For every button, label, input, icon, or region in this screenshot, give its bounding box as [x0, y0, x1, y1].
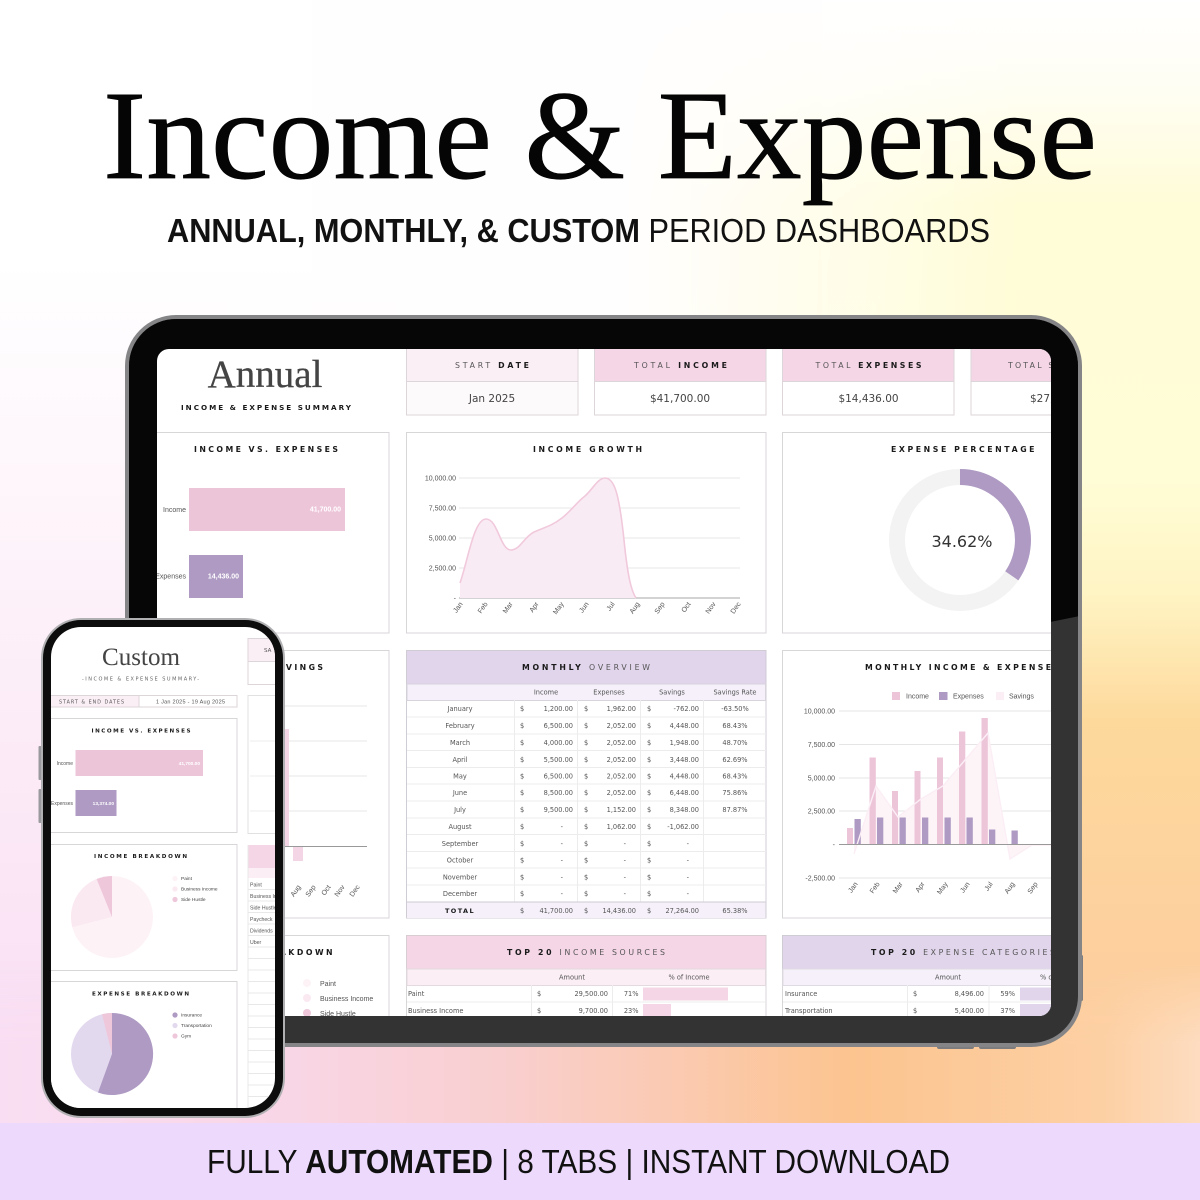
panel: income growth chart: -: [454, 596, 457, 602]
panel: savings chart: SAVINGS: [270, 663, 325, 672]
panel: custom income vs expenses: Expenses: [51, 801, 73, 807]
table rows: June: [452, 789, 467, 797]
table rows: $: [520, 840, 524, 848]
side column: table: Paint: [250, 882, 262, 888]
panel: top 20 expense categories: 5,400.00: [955, 1007, 984, 1015]
chart legend: Income: [906, 694, 929, 700]
phone side buttons: [38, 746, 42, 823]
month labels: Jan: [847, 881, 860, 894]
panel: income vs expenses: 14,436.00: [208, 574, 239, 580]
table rows: $: [584, 890, 588, 898]
table rows: 4,448.00: [670, 772, 699, 780]
panel: top 20 income sources: 9,700.00: [579, 1007, 608, 1015]
table rows: 1,062.00: [607, 823, 636, 831]
bar: income: [189, 488, 345, 531]
panel: top 20 income sources: $: [537, 1007, 541, 1015]
panel: monthly overview table: Expenses: [593, 688, 625, 696]
panel: income breakdown legend: BREAKDOWN: [255, 948, 335, 957]
panel: top 20 income sources: Amount: [559, 974, 585, 982]
bar: expenses: [189, 555, 243, 598]
phone bezel: [41, 618, 285, 1118]
table rows: $: [647, 840, 651, 848]
date range row: [40, 696, 237, 707]
month labels: Nov: [705, 601, 718, 615]
table rows: 6,500.00: [544, 722, 573, 730]
table rows: -: [687, 856, 690, 864]
panel: monthly income and expenses chart: 10,000.00: [804, 708, 835, 716]
panel: top 20 expense categories: Transportation: [784, 1007, 833, 1015]
table total row: TOTAL: [445, 907, 475, 915]
table rows: $: [584, 874, 588, 882]
table total row: $: [647, 907, 651, 915]
date range row: 1 Jan 2025 - 19 Aug 2025: [156, 700, 225, 706]
panel: income growth chart: 7,500.00: [429, 506, 456, 512]
table rows: 9,500.00: [544, 806, 573, 814]
heading: Custom: -INCOME & EXPENSE SUMMARY-: [82, 676, 199, 682]
table rows: $: [584, 806, 588, 814]
table rows: -63.50%: [721, 705, 749, 713]
month labels: Jan: [452, 601, 465, 614]
table rows: May: [453, 772, 467, 780]
table rows: -: [687, 890, 690, 898]
panel: top 20 expense categories: 8,496.00: [955, 990, 984, 998]
panel: custom income breakdown pie: Business Income: [181, 886, 218, 892]
panel: savings chart: Aug: [290, 884, 303, 898]
table rows: $: [584, 856, 588, 864]
panel: custom expense breakdown pie: Gym: [181, 1034, 191, 1040]
table rows: -762.00: [674, 705, 699, 713]
table rows: -: [624, 890, 627, 898]
panel: monthly overview table: Income: [534, 688, 558, 696]
table rows: 6,500.00: [544, 772, 573, 780]
panel: top 20 income sources: Paint: [408, 990, 425, 998]
card: start date: Jan 2025: [468, 393, 515, 405]
panel: monthly income and expenses chart: [782, 650, 1082, 918]
heading: Annual: INCOME & EXPENSE SUMMARY: [181, 403, 352, 412]
panel: income growth chart: INCOME GROWTH: [533, 445, 642, 454]
table rows: $: [584, 739, 588, 747]
table rows: 4,000.00: [544, 739, 573, 747]
card: total expenses: $14,436.00: [838, 393, 899, 405]
panel: custom income breakdown pie: INCOME BREAKDOWN: [94, 854, 187, 860]
tablet device: [100, 300, 1142, 1049]
panel: income vs expenses: Expenses: [155, 574, 186, 580]
heading: Custom: [82, 648, 199, 680]
side column: table: [248, 845, 275, 1108]
card: total savings: [970, 349, 1051, 416]
month labels: Jun: [959, 881, 972, 894]
table rows: December: [443, 890, 477, 898]
panel: income vs expenses: 41,700.00: [310, 506, 341, 514]
table rows: -: [624, 856, 627, 864]
chart legend: Savings: [1009, 694, 1034, 700]
month labels: Feb: [477, 601, 490, 615]
month labels: [453, 602, 740, 614]
table rows: $: [520, 739, 524, 747]
table rows: -: [561, 840, 564, 848]
month labels: Apr: [529, 601, 541, 614]
panel: savings chart: [284, 650, 390, 918]
card: total income: TOTAL INCOME: [633, 361, 727, 370]
side column: table: Paycheck: [250, 917, 273, 923]
table rows: -: [687, 840, 690, 848]
panel: custom income breakdown pie: Side Hustle: [181, 897, 206, 903]
month labels: Feb: [869, 881, 882, 895]
table total row: 27,264.00: [665, 907, 699, 915]
panel: custom income vs expenses: 13,374.00: [93, 801, 114, 807]
panel: top 20 expense categories: Insurance: [785, 990, 817, 998]
month labels: Oct: [681, 601, 693, 614]
panel: income breakdown legend: Business Income: [320, 996, 373, 1003]
table rows: 2,052.00: [607, 722, 636, 730]
table rows: 62.69%: [722, 756, 748, 764]
area line: [460, 478, 636, 598]
phone device: [38, 618, 298, 1122]
panel: monthly overview table: Savings: [659, 688, 685, 696]
month labels: Sep: [1027, 881, 1040, 895]
panel: monthly income and expenses chart: -2,500.00: [805, 876, 835, 882]
chart legend: Expenses: [953, 694, 984, 700]
table rows: $: [520, 705, 524, 713]
table rows: $: [584, 840, 588, 848]
panel: top 20 income sources: TOP 20 INCOME SOURCES: [507, 948, 665, 957]
panel: top 20 income sources: 23%: [624, 1007, 638, 1015]
table total row: $: [520, 907, 524, 915]
table rows: $: [520, 890, 524, 898]
table total row: $: [584, 907, 588, 915]
panel: monthly income and expenses chart: 7,500.00: [808, 742, 835, 749]
table rows: $: [584, 705, 588, 713]
table rows: 8,500.00: [544, 789, 573, 797]
card: start date: [406, 345, 578, 415]
table rows: February: [445, 722, 475, 730]
panel: top 20 expense categories: $: [913, 1007, 917, 1015]
card: total savings: TOTAL SAVINGS: [1007, 361, 1098, 370]
table rows: $: [520, 856, 524, 864]
table rows: $: [520, 722, 524, 730]
month labels: [848, 882, 1038, 894]
table rows: 8,348.00: [670, 806, 699, 814]
panel: income growth chart: 2,500.00: [429, 566, 456, 572]
footer band: [0, 1123, 1200, 1200]
panel: custom income vs expenses: [40, 718, 237, 832]
panel: top 20 income sources: Business Income: [408, 1007, 463, 1015]
panel: savings chart: Nov: [334, 884, 347, 898]
panel: income growth chart: [406, 432, 766, 633]
table rows: -: [561, 874, 564, 882]
panel: monthly overview table: Savings Rate: [714, 688, 756, 696]
table rows: 2,052.00: [607, 772, 636, 780]
panel: custom income vs expenses: INCOME VS. EXPENSES: [92, 728, 190, 734]
table rows: -: [561, 823, 564, 831]
panel: income vs expenses: Income: [163, 507, 186, 514]
chart legend: [892, 692, 1034, 700]
side column: table: Business Income: [250, 894, 290, 900]
panel: top 20 expense categories: [782, 935, 1051, 1016]
table rows: $: [520, 806, 524, 814]
table rows: $: [520, 772, 524, 780]
table rows: $: [647, 772, 651, 780]
month labels: Jul: [984, 881, 995, 892]
table rows: 87.87%: [722, 806, 748, 814]
table rows: -: [561, 890, 564, 898]
card: total expenses: TOTAL EXPENSES: [814, 361, 922, 370]
panel: top 20 income sources: % of Income: [668, 974, 710, 982]
table rows: November: [443, 874, 477, 882]
table rows: $: [584, 722, 588, 730]
savings line: [854, 733, 1060, 859]
phone screen: [51, 638, 275, 1108]
side column: table: Side Hustle: [250, 906, 277, 912]
side column: card and chart: [248, 638, 275, 834]
panel: custom income breakdown pie: [40, 844, 237, 970]
table rows: April: [452, 756, 468, 764]
month labels: Sep: [654, 601, 667, 615]
title: Income & Expense: [103, 66, 1097, 206]
table rows: -1,062.00: [667, 823, 699, 831]
table total row: [445, 908, 748, 914]
panel: income breakdown legend: [285, 935, 390, 1016]
table rows: July: [453, 806, 466, 814]
panel: monthly income and expenses chart: -: [833, 842, 836, 849]
month labels: Dec: [730, 601, 743, 615]
month labels: Mar: [892, 881, 905, 895]
panel: top 20 expense categories: Amount: [935, 974, 961, 982]
card: start date: START DATE: [455, 361, 529, 370]
table rows: 1,962.00: [607, 705, 636, 713]
panel: income vs expenses: INCOME VS. EXPENSES: [194, 445, 338, 454]
panel: custom expense breakdown pie: Insurance: [181, 1012, 202, 1018]
panel: savings chart: Dec: [349, 884, 362, 898]
panel: monthly income and expenses chart: 5,000.00: [808, 776, 835, 782]
panel: income vs expenses: [140, 432, 389, 633]
month labels: Aug: [629, 601, 642, 615]
expense bars: [854, 818, 1018, 844]
table rows: $: [647, 823, 651, 831]
table rows: 2,052.00: [607, 756, 636, 764]
panel: custom expense breakdown pie: [51, 981, 238, 1108]
table rows: $: [647, 806, 651, 814]
table rows: 1,200.00: [544, 705, 573, 713]
card: total savings: $27,264.00: [1030, 393, 1090, 405]
month labels: Jun: [578, 601, 591, 614]
panel: monthly income and expenses chart: 2,500.00: [808, 808, 835, 816]
panel: savings chart: Oct: [321, 884, 333, 897]
table total row: 65.38%: [722, 907, 748, 915]
table rows: $: [647, 739, 651, 747]
table rows: January: [446, 705, 473, 713]
panel: income breakdown legend: Side Hustle: [320, 1011, 356, 1018]
side column: table: Uber: [250, 940, 262, 946]
table rows: $: [584, 789, 588, 797]
month labels: May: [936, 881, 950, 896]
table rows: 68.43%: [722, 772, 748, 780]
panel: monthly income and expenses chart: MONTHLY INCOME & EXPENSES: [865, 663, 1059, 672]
panel: top 20 expense categories: TOP 20 EXPENSE CATEGORIES: [871, 948, 1055, 957]
table rows: October: [447, 856, 473, 864]
tablet screen: [157, 349, 1051, 1016]
table rows: $: [647, 856, 651, 864]
panel: monthly overview table: MONTHLY OVERVIEW: [522, 663, 650, 672]
month labels: Jul: [606, 601, 617, 612]
panel: top 20 expense categories: % of Expenses: [1040, 974, 1089, 982]
panel: custom income breakdown pie: Paint: [181, 876, 193, 882]
savings area: [854, 739, 1030, 858]
table rows: $: [520, 823, 524, 831]
heading: Annual: [182, 360, 351, 410]
table total row: 14,436.00: [602, 907, 636, 915]
table rows: $: [584, 756, 588, 764]
heading: Custom: Custom: [102, 644, 181, 671]
heading: Annual: Annual: [208, 353, 323, 396]
panel: custom income vs expenses: Income: [57, 761, 73, 767]
table rows: $: [584, 823, 588, 831]
table rows: -: [687, 874, 690, 882]
table rows: $: [647, 890, 651, 898]
table rows: $: [520, 874, 524, 882]
panel: custom expense breakdown pie: EXPENSE BREAKDOWN: [92, 992, 189, 998]
panel: custom expense breakdown pie: Transportation: [181, 1023, 212, 1029]
table rows: 6,448.00: [670, 789, 699, 797]
table rows: September: [442, 840, 479, 848]
panel: monthly overview table: [406, 650, 766, 918]
footer band: FULLY AUTOMATED | 8 TABS | INSTANT DOWNLOAD: [207, 1143, 950, 1180]
table rows: $: [647, 756, 651, 764]
table rows: 2,052.00: [607, 789, 636, 797]
month labels: May: [552, 601, 566, 616]
table rows: March: [450, 739, 470, 747]
table rows: 68.43%: [722, 722, 748, 730]
table rows: 5,500.00: [544, 756, 573, 764]
side column: table: Dividends: [250, 928, 273, 934]
table rows: August: [448, 823, 472, 831]
table rows: $: [647, 705, 651, 713]
panel: income growth chart: 5,000.00: [429, 536, 456, 542]
table rows: 1,152.00: [607, 806, 636, 814]
panel: expense percentage donut: EXPENSE PERCENTAGE: [891, 445, 1034, 454]
table rows: [442, 705, 749, 898]
card: total expenses: [782, 345, 954, 415]
table rows: 1,948.00: [670, 739, 699, 747]
month labels: Apr: [915, 881, 927, 894]
table rows: $: [647, 722, 651, 730]
subtitle: ANNUAL, MONTHLY, & CUSTOM PERIOD DASHBOARDS: [167, 212, 990, 249]
table total row: 41,700.00: [539, 907, 573, 915]
card: total income: [594, 345, 766, 415]
month labels: Aug: [1004, 881, 1017, 895]
panel: top 20 income sources: 71%: [624, 990, 638, 998]
panel: top 20 income sources: [406, 935, 766, 1016]
tablet buttons: [937, 955, 1083, 1049]
panel: top 20 income sources: $: [537, 990, 541, 998]
table rows: -: [624, 840, 627, 848]
panel: top 20 expense categories: $: [913, 990, 917, 998]
month labels: Mar: [502, 601, 515, 615]
table rows: 4,448.00: [670, 722, 699, 730]
table rows: -: [624, 874, 627, 882]
side column: card and chart: SA: [264, 648, 272, 654]
table rows: $: [520, 756, 524, 764]
table rows: 3,448.00: [670, 756, 699, 764]
card: total income: $41,700.00: [650, 393, 710, 405]
panel: top 20 expense categories: 37%: [1000, 1007, 1015, 1015]
panel: expense percentage donut: [782, 432, 1082, 633]
table rows: -: [561, 856, 564, 864]
panel: expense percentage donut: 34.62%: [931, 532, 993, 551]
table rows: 2,052.00: [607, 739, 636, 747]
tablet bezel: [100, 300, 1100, 1047]
table rows: 75.86%: [722, 789, 748, 797]
panel: top 20 expense categories: 59%: [1000, 990, 1015, 998]
table rows: $: [647, 789, 651, 797]
panel: income growth chart: 10,000.00: [425, 476, 456, 482]
panel: savings chart: Sep: [305, 884, 318, 898]
table rows: $: [520, 789, 524, 797]
panel: custom income vs expenses: 41,700.00: [179, 761, 200, 767]
table rows: $: [647, 874, 651, 882]
table rows: $: [584, 772, 588, 780]
date range row: START & END DATES: [59, 700, 124, 706]
panel: income breakdown legend: Paint: [320, 981, 336, 988]
table header: [406, 650, 766, 684]
table rows: 48.70%: [722, 739, 748, 747]
panel: top 20 income sources: 29,500.00: [574, 990, 608, 998]
income bars: [847, 718, 988, 844]
